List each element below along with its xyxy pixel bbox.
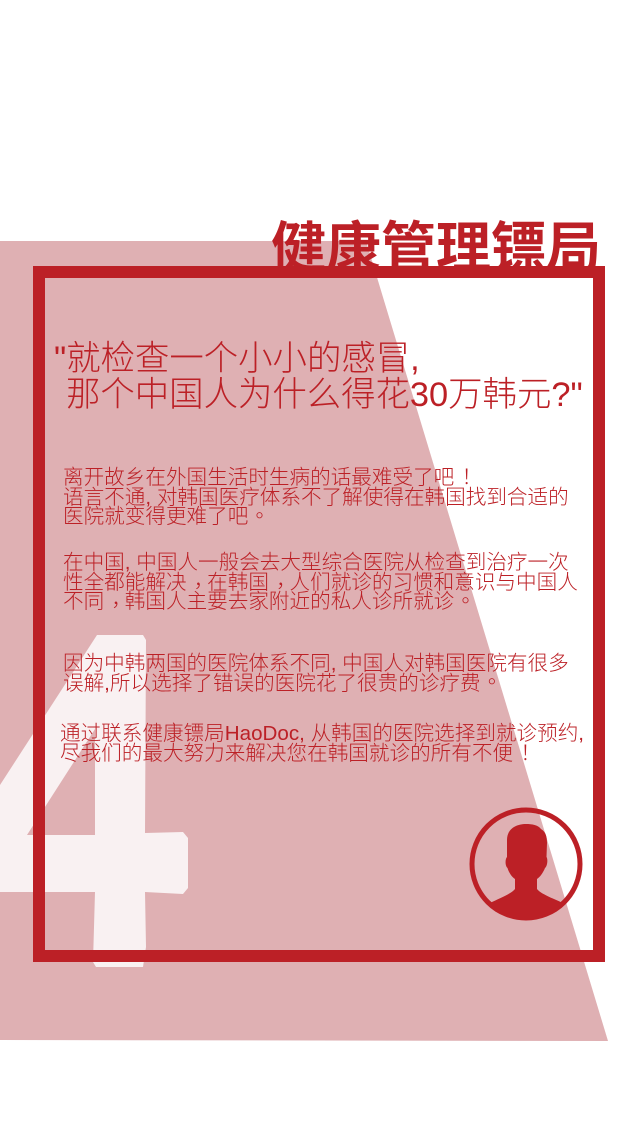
icon: person in circle	[470, 808, 582, 920]
paragraph 3	[63, 652, 569, 695]
paragraph 4: 尽我们的最大努力来解决您在韩国就诊的所有不便 ！	[60, 742, 541, 765]
paragraph 2: 在中国, 中国人一般会去大型综合医院从检查到治疗一次	[63, 551, 569, 574]
paragraph 4	[60, 722, 584, 765]
quote heading	[54, 340, 583, 414]
paragraph 1: 医院就变得更难了吧 。	[63, 499, 276, 528]
paragraph 3: 因为中韩两国的医院体系不同, 中国人对韩国医院有很多	[63, 652, 569, 675]
quote heading: 那个中国人为什么得花30万韩元?"	[66, 376, 583, 414]
paragraph 1: 语言不通, 对韩国医疗体系不了解使得在韩国找到合适的	[63, 486, 569, 509]
paragraph 1	[63, 466, 569, 528]
quote heading: "就检查一个小小的感冒,	[54, 340, 420, 378]
paragraph 2	[63, 551, 578, 613]
red frame	[33, 266, 605, 962]
paragraph 2: 不同 ，韩国人主要去家附近的私人诊所就诊 。	[63, 584, 482, 613]
paragraph 1: 离开故乡在外国生活时生病的话最难受了吧 ！	[63, 466, 482, 489]
paragraph 4: 通过联系健康镖局HaoDoc, 从韩国的医院选择到就诊预约,	[60, 722, 584, 745]
paragraph 2: 性全都能解决 ，在韩国 ，人们就诊的习惯和意识与中国人	[63, 569, 578, 594]
paragraph 3: 误解,所以选择了错误的医院花了很贵的诊疗费 。	[63, 665, 508, 695]
